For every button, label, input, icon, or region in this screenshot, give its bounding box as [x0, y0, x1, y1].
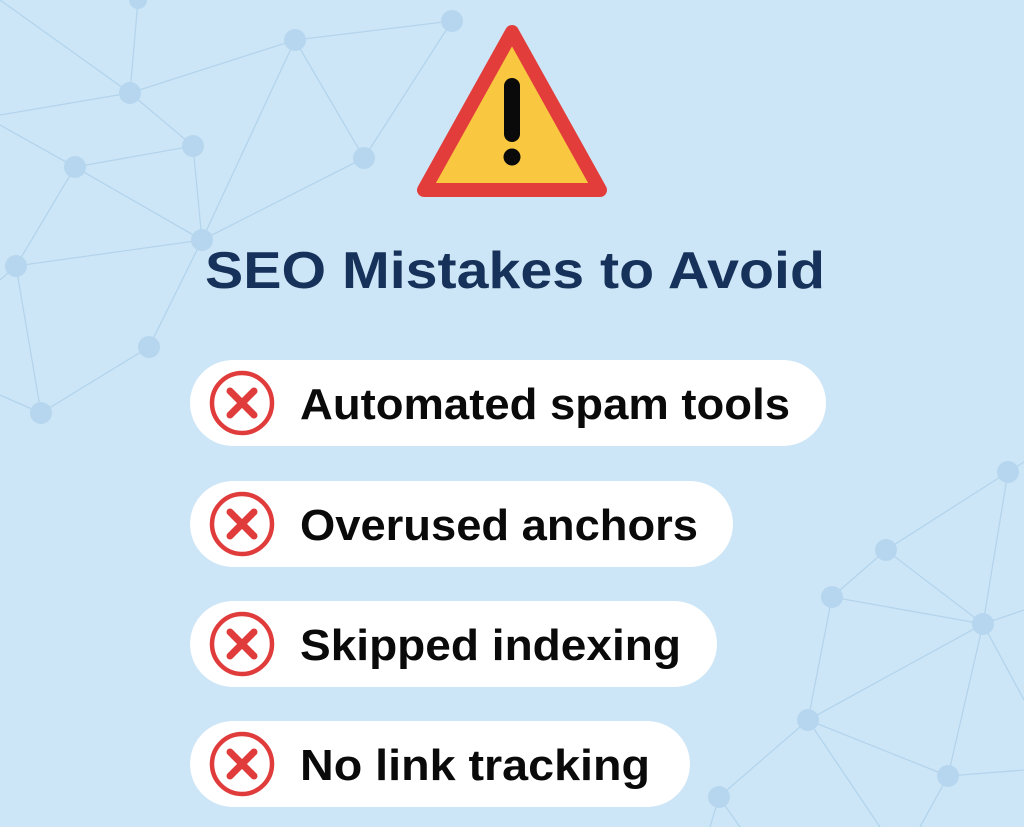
item: automated spam tools: [190, 360, 826, 446]
icon: warning triangle: [424, 32, 600, 190]
item: automated spam tools: Automated spam tools: [300, 380, 790, 429]
item: skipped indexing: [190, 601, 717, 687]
item: no link tracking: No link tracking: [300, 741, 650, 790]
item: overused anchors: Overused anchors: [300, 501, 698, 550]
item: no link tracking: [190, 721, 690, 807]
item: overused anchors: [190, 481, 733, 567]
item: skipped indexing: Skipped indexing: [300, 621, 681, 670]
title: SEO Mistakes to Avoid: [205, 242, 825, 300]
